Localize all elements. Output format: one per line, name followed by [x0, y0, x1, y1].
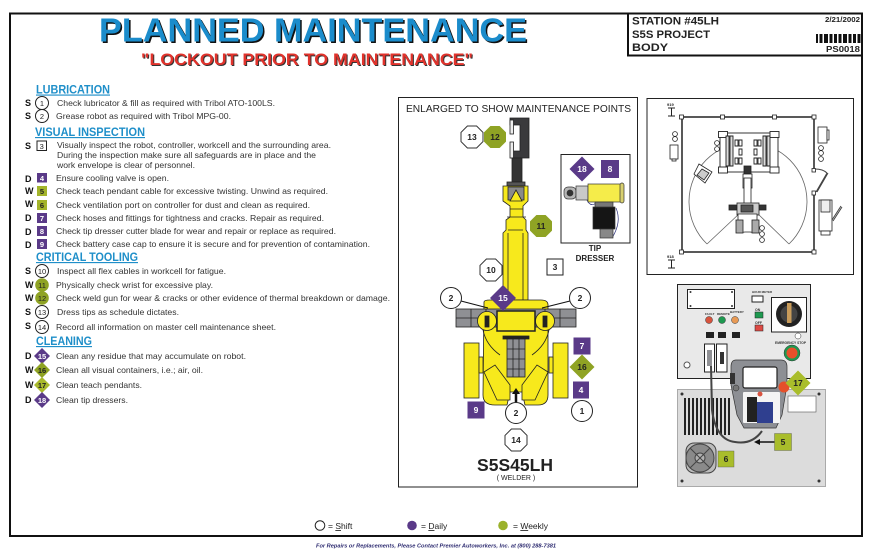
callout 7: 7 — [580, 341, 585, 351]
robot illustration — [456, 118, 576, 405]
task 2 — [25, 110, 231, 122]
callout 6: 6 — [724, 454, 729, 464]
task 17: W — [25, 380, 34, 390]
task 7: Check hoses and fittings for tightness and cracks. Repair as required. — [56, 213, 324, 223]
station info box — [628, 14, 862, 56]
safety fence — [680, 115, 816, 254]
task 8: Check tip dresser cutter blade for wear and repair or replace as required. — [56, 226, 336, 236]
station info box: BODY — [632, 42, 669, 54]
task 3: Visually inspect the robot, controller, workcell and the surrounding area. — [57, 140, 331, 150]
task 3: 3 — [40, 142, 44, 151]
callout 10: 10 — [486, 265, 496, 275]
section marker bottom — [667, 254, 675, 268]
task 14: 14 — [38, 323, 46, 332]
task 5: W — [25, 186, 34, 196]
task 16: W — [25, 365, 34, 375]
heading: lubrication: LUBRICATION — [36, 84, 110, 96]
weld gun — [510, 118, 529, 158]
vent slots — [684, 398, 730, 435]
task 14: Record all information on master cell maintenance sheet. — [56, 322, 276, 332]
panel: workcell floor plan — [647, 98, 854, 274]
task 9: Check battery case cap to ensure it is secure and for prevention of contamination. — [56, 239, 370, 249]
callout 5 — [774, 434, 792, 450]
section marker top — [667, 102, 675, 116]
task 16 — [25, 362, 203, 378]
section: critical tooling — [25, 252, 390, 334]
arrow head — [512, 388, 520, 394]
callout 9: 9 — [474, 405, 479, 415]
task 17: 17 — [38, 381, 46, 390]
task 15 — [25, 348, 246, 364]
indicator lights — [706, 316, 712, 324]
controller upper plate: BATTERY — [730, 310, 744, 314]
panel heading: ENLARGED TO SHOW MAINTENANCE POINTS — [406, 104, 631, 115]
arrow to grease point — [515, 392, 517, 402]
section: lubrication — [25, 84, 275, 122]
callout 15 — [490, 285, 516, 311]
controller upper plate: FAULT — [705, 312, 715, 316]
callout 12: 12 — [490, 132, 500, 142]
heading: cleaning: CLEANING — [36, 336, 92, 348]
task 18 — [25, 392, 128, 408]
task 10: S — [25, 266, 31, 276]
switches — [706, 332, 714, 338]
callout 17 — [786, 370, 810, 396]
controller upper plate: HOUR METER — [752, 290, 773, 294]
station info box: PS0018 — [826, 44, 860, 54]
callout 9 — [468, 402, 484, 418]
callout 17: 17 — [793, 378, 803, 388]
callout 4 — [573, 382, 589, 398]
task 16: 16 — [38, 366, 46, 375]
legend: daily — [407, 521, 448, 531]
robot reach envelope — [689, 143, 807, 244]
task 14: S — [25, 321, 31, 331]
task 5: Check teach pendant cable for excessive twisting. Unwind as required. — [56, 186, 328, 196]
task 15: 15 — [38, 352, 46, 361]
task 12: W — [25, 293, 34, 303]
task 13: Dress tips as schedule dictates. — [57, 307, 179, 317]
legend: shift — [315, 521, 353, 531]
emergency stop — [784, 345, 800, 361]
ports — [704, 344, 714, 372]
task 17: Clean teach pendants. — [56, 380, 142, 390]
task 11: W — [25, 280, 34, 290]
task 4 — [25, 173, 169, 184]
side plates — [464, 343, 479, 398]
barcode — [816, 34, 860, 43]
task 11 — [25, 278, 213, 292]
tip dresser label: DRESSER — [576, 254, 615, 263]
callout 7 — [574, 338, 590, 354]
callout 16 — [570, 354, 594, 380]
controller upper plate — [678, 284, 810, 378]
task 6: Check ventilation port on controller for dust and clean as required. — [56, 200, 310, 210]
task 17 — [25, 377, 142, 393]
subtitle: lockout warning: "LOCKOUT PRIOR TO MAINTENANCE" — [141, 51, 473, 69]
task 8: D — [25, 227, 32, 237]
callout 14 — [505, 429, 527, 451]
robot top view — [729, 166, 766, 233]
callout 13 — [461, 126, 483, 148]
task 12: Check weld gun for wear & cracks or other evidence of thermal breakdown or damage. — [56, 293, 390, 303]
task 4: 4 — [40, 174, 45, 183]
task 10: Inspect all flex cables in workcell for fatigue. — [57, 266, 226, 276]
tip dresser drawing — [564, 183, 624, 238]
callout 2 right — [570, 288, 590, 308]
legend: weekly: = Weekly — [513, 521, 549, 531]
callout 2 left: 2 — [449, 293, 454, 303]
gray cross bar — [456, 309, 576, 327]
callout 2 left — [440, 288, 462, 308]
task 1: 1 — [40, 99, 44, 108]
callout 6 — [718, 451, 734, 467]
callout 8: 8 — [608, 164, 613, 174]
section marker top: 919 — [667, 102, 674, 107]
robot type: ( WELDER ) — [497, 475, 535, 482]
panel: controller and teach pendant — [678, 284, 826, 486]
task 4: Ensure cooling valve is open. — [56, 173, 169, 183]
task 4: D — [25, 174, 32, 184]
task 7: D — [25, 213, 32, 223]
task 2: Grease robot as required with Tribol MPG-00. — [56, 111, 231, 121]
callout 2 bottom: 2 — [514, 408, 519, 418]
callout 11: 11 — [536, 221, 546, 231]
task 6: W — [25, 199, 34, 209]
controller lower plate — [678, 390, 826, 486]
task 10: 10 — [38, 267, 46, 276]
robot model name: S5S45LH — [477, 455, 553, 475]
station info box: STATION #45LH — [632, 16, 719, 28]
task 9: D — [25, 240, 32, 250]
gate and door — [815, 169, 842, 221]
center column — [507, 339, 525, 377]
robot base — [483, 300, 548, 405]
title: PLANNED MAINTENANCE — [100, 14, 528, 51]
task 11: 11 — [38, 281, 46, 290]
section: cleaning — [25, 336, 246, 408]
task 3: During the inspection make sure all safeguards are in place and the — [57, 150, 316, 160]
task 18: 18 — [38, 396, 46, 405]
heading: critical tooling: CRITICAL TOOLING — [36, 252, 138, 264]
task 3: work envelope is clear of personnel. — [56, 160, 195, 170]
task 1: Check lubricator & fill as required with Tribol ATO-100LS. — [57, 98, 275, 108]
controller upper plate: OFF — [755, 321, 763, 325]
leader lines — [461, 301, 570, 308]
callout 18: 18 — [577, 164, 587, 174]
arrow to pendant cable — [754, 439, 775, 445]
callout 11 — [530, 215, 552, 237]
callout 4: 4 — [579, 385, 584, 395]
heading: visual inspection: VISUAL INSPECTION — [35, 127, 145, 139]
station info box: 2/21/2002 — [825, 17, 860, 24]
teach pendant — [730, 360, 790, 428]
task 12 — [25, 291, 390, 305]
callout 14: 14 — [511, 435, 521, 445]
task 14 — [25, 320, 276, 334]
callout 1: 1 — [580, 406, 585, 416]
fixture table — [718, 132, 779, 173]
on and off buttons — [755, 312, 763, 318]
task 16: Clean all visual containers, i.e.; air, oil. — [56, 365, 203, 375]
callout 5: 5 — [781, 437, 786, 447]
controller upper plate: REMOTE — [717, 312, 730, 316]
task 3 — [25, 140, 331, 170]
task 2: S — [25, 111, 31, 121]
pendant cable — [711, 366, 762, 443]
inset: tip dresser — [561, 154, 630, 263]
callout 3 — [547, 259, 563, 275]
section marker bottom: 918 — [667, 254, 674, 259]
legend: weekly — [498, 521, 549, 531]
task 13: 13 — [38, 308, 46, 317]
callout 10 — [480, 259, 502, 281]
disconnect switch — [772, 298, 806, 332]
task 12: 12 — [38, 294, 46, 303]
legend: shift: = Shift — [328, 521, 353, 531]
fan — [686, 443, 716, 473]
callout 12 — [484, 126, 506, 148]
title: PLANNED MAINTENANCE — [99, 12, 527, 50]
task 9: 9 — [40, 240, 44, 249]
task 6: 6 — [40, 201, 44, 210]
task 15: Clean any residue that may accumulate on robot. — [56, 351, 246, 361]
task 8: 8 — [40, 227, 44, 236]
callout 3: 3 — [553, 262, 558, 272]
task 15: D — [25, 351, 32, 361]
task 1: S — [25, 98, 31, 108]
callout 2 bottom — [506, 402, 526, 424]
section: visual inspection — [25, 127, 370, 250]
task 13: S — [25, 307, 31, 317]
subtitle: lockout warning: "LOCKOUT PRIOR TO MAINTENANCE" — [142, 52, 474, 70]
callout 15: 15 — [498, 293, 508, 303]
callout 1 — [572, 400, 592, 422]
callout 13: 13 — [467, 132, 477, 142]
callout 16: 16 — [577, 362, 587, 372]
legend: daily: = Daily — [421, 521, 448, 531]
robot arm — [503, 186, 528, 300]
callout 2 right: 2 — [578, 293, 583, 303]
controller upper plate: ON — [755, 308, 761, 312]
pallets and cabinets — [670, 127, 832, 242]
controller upper plate: EMERGENCY STOP — [775, 341, 807, 345]
tip dresser label: TIP — [589, 244, 602, 253]
task 18: D — [25, 395, 32, 405]
task 13 — [25, 306, 179, 318]
task 10 — [25, 264, 226, 278]
task 11: Physically check wrist for excessive play. — [56, 280, 213, 290]
task 5: 5 — [40, 187, 44, 196]
station info box: S5S PROJECT — [632, 29, 710, 41]
panel: enlarged robot maintenance points — [398, 98, 638, 487]
legend — [315, 521, 549, 531]
task 7: 7 — [40, 214, 44, 223]
footer contact line: For Repairs or Replacements, Please Contact Premier Autoworkers, Inc. at (800) 288-7381 — [316, 544, 556, 550]
task 3: S — [25, 141, 31, 151]
task 2: 2 — [40, 112, 44, 121]
task 1 — [25, 96, 275, 110]
task 18: Clean tip dressers. — [56, 395, 128, 405]
